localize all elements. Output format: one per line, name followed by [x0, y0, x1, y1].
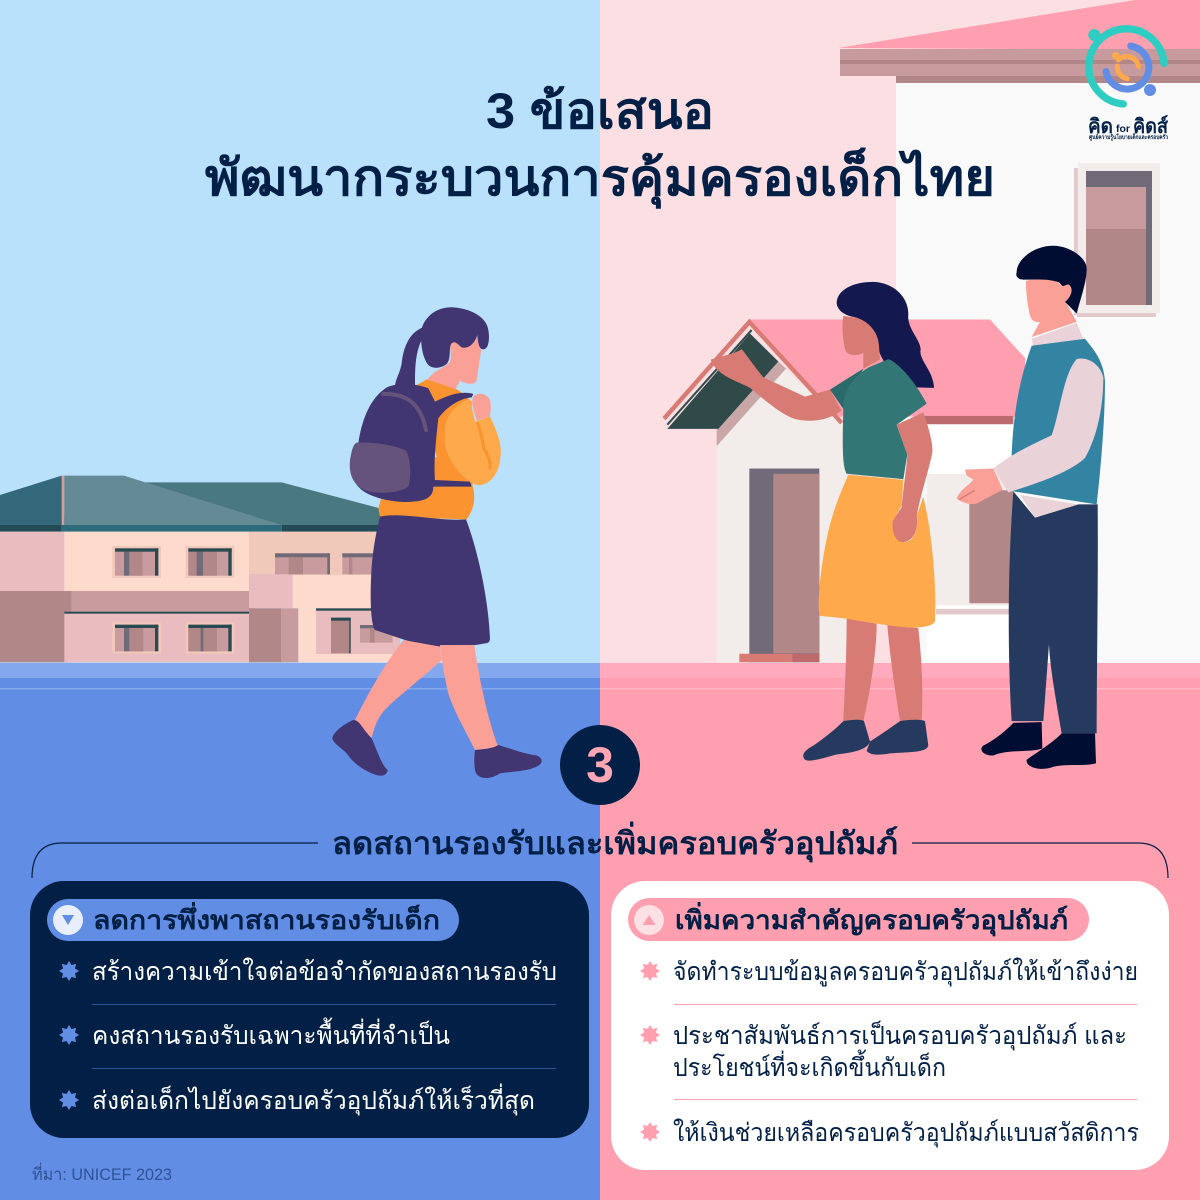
figure: girl with backpack: [332, 307, 542, 778]
logo wordmark: คิดส์: [1133, 115, 1169, 138]
small model house: [664, 319, 1025, 662]
list item 1: จัดทำระบบข้อมูลครอบครัวอุปถัมภ์ให้เข้าถึงง่าย: [673, 957, 1138, 987]
section heading: ลดสถานรองรับและเพิ่มครอบครัวอุปถัมภ์: [332, 821, 898, 863]
list item 3: ส่งต่อเด็กไปยังครอบครัวอุปถัมภ์ให้เร็วที่สุด: [92, 1083, 535, 1116]
title: [205, 83, 995, 209]
list item 2: คงสถานรองรับเฉพาะพื้นที่ที่จำเป็น: [92, 1017, 450, 1050]
left row of houses: [0, 476, 400, 662]
figure: man in vest: [957, 246, 1105, 769]
background: right wall and ground: [600, 0, 1200, 1200]
large house window: [1074, 163, 1160, 317]
panel heading pill: เพิ่มความสำคัญครอบครัวอุปถัมภ์: [675, 901, 1068, 937]
list item 2: ประชาสัมพันธ์การเป็นครอบครัวอุปถัมภ์ และ: [673, 1020, 1127, 1051]
large background house: [838, 0, 1200, 663]
panel: increase importance of foster families: [611, 881, 1169, 1170]
logo wordmark: [1088, 115, 1169, 142]
list item 2: ประโยชน์ที่จะเกิดขึ้นกับเด็ก: [673, 1049, 946, 1082]
panel heading pill: ลดการพึ่งพาสถานรองรับเด็ก: [93, 901, 440, 935]
logo: Kid for Kids: [1088, 29, 1169, 142]
list item 1: สร้างความเข้าใจต่อข้อจำกัดของสถานรองรับ: [92, 957, 557, 986]
logo wordmark: คิด: [1088, 116, 1113, 138]
title: พัฒนากระบวนการคุ้มครองเด็กไทย: [205, 147, 995, 209]
logo mark: rings: [1088, 29, 1164, 104]
figure: woman reaching for the roof: [711, 282, 935, 761]
number badge: 3: [586, 737, 614, 793]
panel heading pill: [47, 899, 459, 941]
title: 3 ข้อเสนอ: [486, 83, 714, 139]
panel: reduce reliance on institutions: [30, 881, 589, 1138]
number badge: [560, 725, 640, 805]
background: left sky and ground: [0, 0, 600, 1200]
source note: ที่มา: UNICEF 2023: [32, 1162, 172, 1184]
logo wordmark: for: [1116, 124, 1130, 135]
list item 3: ให้เงินช่วยเหลือครอบครัวอุปถัมภ์แบบสวัสดิการ: [673, 1118, 1139, 1148]
list item 2: [640, 1020, 1127, 1082]
logo wordmark: ศูนย์ความรู้นโยบายเด็กและครอบครัว: [1089, 132, 1169, 142]
panel heading pill: [628, 898, 1089, 941]
